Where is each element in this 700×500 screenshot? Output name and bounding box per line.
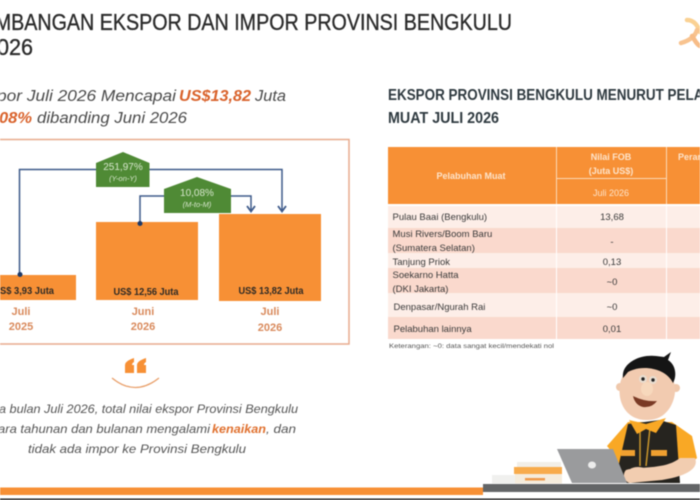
- table header: Juli 2026: [593, 188, 629, 198]
- table header: [388, 147, 700, 204]
- heading: ports table: MUAT JULI 2026: [388, 110, 499, 127]
- laptop: [557, 449, 627, 483]
- summary text: tidak ada impor ke Provinsi Bengkulu: [28, 442, 246, 456]
- table header: (Juta US$): [589, 166, 633, 176]
- bar: Juli 2025: S$ 3,93 Juta: [0, 285, 54, 297]
- bar: Juli 2026: [219, 214, 321, 334]
- mouth: [633, 396, 657, 407]
- table: export by port: [388, 147, 700, 350]
- table header: Pelabuhan Muat: [436, 171, 506, 181]
- summary text: , dan: [266, 422, 296, 436]
- callout: year on year: (Y-on-Y): [109, 174, 137, 183]
- bar: Juli 2026: Juli: [261, 306, 279, 318]
- icon: logo: [681, 20, 700, 46]
- bar: Juli 2026: US$ 13,82 Juta: [238, 285, 304, 297]
- subtitle: Juta: [254, 88, 286, 105]
- summary text: [0, 402, 298, 456]
- sleeves: [607, 422, 697, 470]
- subtitle: por Juli 2026 Mencapai: [0, 88, 177, 105]
- subtitle: US$13,82: [179, 88, 251, 105]
- books: [492, 462, 562, 484]
- bar: Juni 2026: US$ 12,56 Juta: [114, 286, 179, 298]
- arrow: month to month: [138, 196, 255, 226]
- icon: mascot with laptop: [483, 352, 700, 492]
- table rows: Denpasar/Ngurah Rai: [394, 302, 485, 313]
- arm: [624, 458, 696, 483]
- hand: [627, 467, 649, 481]
- icon: quote mark: [112, 358, 159, 388]
- summary text: kenaikan: [212, 422, 266, 436]
- heading: ports table: [388, 87, 700, 127]
- callout: year on year: [96, 152, 150, 187]
- summary text: a bulan Juli 2026, total nilai ekspor Provinsi Bengkulu: [0, 402, 298, 416]
- subtitle: dibanding Juni 2026: [37, 110, 187, 127]
- bar: Juni 2026: 2026: [131, 321, 155, 333]
- bar: Juni 2026: [96, 222, 198, 333]
- head: [620, 365, 675, 420]
- panel: export chart: [0, 140, 349, 344]
- table rows: (DKI Jakarta): [392, 284, 448, 295]
- subtitle: [0, 88, 286, 127]
- table rows: -: [610, 237, 614, 248]
- ears: [616, 383, 680, 392]
- table rows: Pelabuhan lainnya: [394, 324, 472, 335]
- callout: year on year: 251,97%: [103, 162, 143, 173]
- table footnote: Keterangan: ~0: data sangat kecil/mendekati nol: [389, 343, 555, 350]
- table rows: (Sumatera Selatan): [392, 243, 475, 254]
- eyes and nose: [639, 375, 647, 383]
- table rows: Pulau Baai (Bengkulu): [392, 212, 487, 223]
- bar: Juli 2025: Juli: [12, 306, 30, 318]
- bar: Juli 2026: 2026: [258, 322, 282, 334]
- bar: Juni 2026: Juni: [132, 306, 154, 318]
- callout: month to month: 10,08%: [180, 188, 214, 199]
- footer bar: [0, 488, 700, 500]
- arrow: year on year: [18, 170, 286, 277]
- table rows: 13,68: [600, 212, 624, 223]
- table rows: Tanjung Priok: [392, 257, 450, 268]
- title: [0, 9, 512, 60]
- table rows: ~0: [607, 277, 617, 288]
- table rows: ~0: [607, 302, 617, 313]
- callout: month to month: (M-to-M): [183, 200, 212, 209]
- table header: Nilai FOB: [591, 152, 632, 162]
- hair: [623, 352, 675, 383]
- table rows: Musi Rivers/Boom Baru: [392, 229, 492, 240]
- collar: [629, 418, 666, 434]
- table rows: [388, 206, 700, 339]
- table rows: Soekarno Hatta: [392, 270, 459, 281]
- bar: Juli 2025: [0, 275, 76, 333]
- summary text: ara tahunan dan bulanan mengalami: [0, 422, 210, 436]
- table rows: 0,13: [603, 257, 621, 268]
- desk: [483, 484, 700, 492]
- callout: month to month: [164, 177, 231, 213]
- vest: [618, 420, 680, 483]
- bar: Juli 2025: 2025: [9, 321, 33, 333]
- table rows: 0,01: [603, 324, 621, 335]
